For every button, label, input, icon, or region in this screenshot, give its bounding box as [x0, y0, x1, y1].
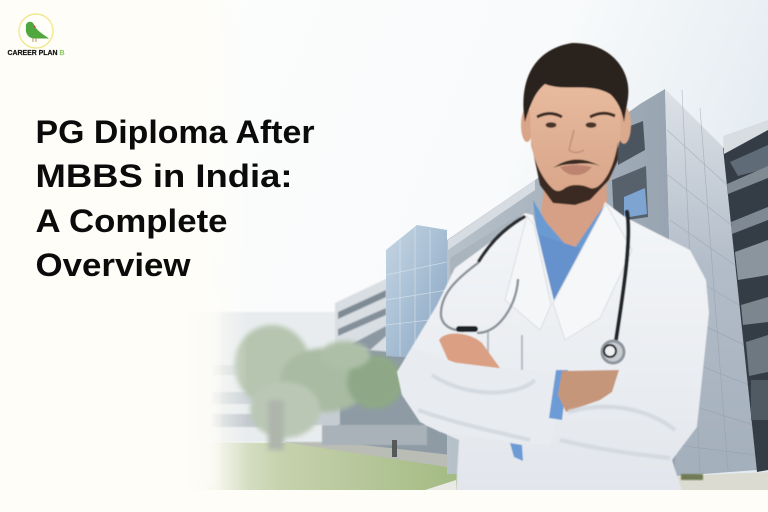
hand left	[439, 334, 500, 368]
logo wordmark: CAREER PLAN B	[8, 50, 64, 57]
title: MBBS in India:	[36, 158, 292, 194]
faded low building	[188, 312, 340, 442]
bottom band	[0, 490, 768, 512]
title: A Complete	[36, 203, 228, 239]
main building front face	[447, 89, 676, 474]
right sleeve crease	[560, 407, 675, 458]
moustache and goatee	[553, 159, 600, 198]
main building ribbon windows	[448, 121, 648, 275]
shrub at building foot	[681, 474, 703, 480]
nose	[569, 130, 584, 152]
logo ring	[19, 14, 53, 48]
coat centre seam	[488, 330, 522, 375]
left fade over photo	[183, 0, 248, 490]
side face tile lines	[667, 90, 756, 472]
distant dark building behind tree	[320, 345, 460, 457]
doctor figure	[397, 43, 709, 491]
beard	[531, 142, 618, 205]
lamp post	[392, 440, 397, 457]
logo	[8, 14, 64, 57]
blue cuff	[549, 370, 568, 420]
blue shirt	[533, 200, 605, 305]
stethoscope	[441, 212, 628, 363]
title: Overview	[36, 247, 191, 283]
lower blue shirt sliver	[510, 443, 523, 461]
glass tower	[386, 225, 447, 360]
tree	[234, 325, 403, 450]
sleeve crossed arm	[397, 347, 568, 445]
lower-left haze	[183, 300, 218, 490]
coat lapels	[505, 216, 551, 330]
pavement sliver near coat	[425, 480, 456, 490]
eyes and brows	[537, 113, 615, 117]
balcony block	[723, 120, 768, 472]
lips	[560, 165, 592, 175]
photo: hospital campus background	[183, 0, 768, 490]
hair	[523, 43, 628, 122]
path beside lawn	[285, 437, 460, 470]
title: PG Diploma After	[36, 114, 314, 150]
white mid building	[335, 278, 390, 352]
logo bird	[26, 22, 49, 42]
lab coat	[397, 202, 709, 491]
title	[36, 114, 314, 283]
main building side face	[665, 89, 757, 476]
head	[521, 43, 631, 205]
forearm	[558, 370, 619, 412]
lawn	[183, 442, 460, 490]
low pale wing in front of dark building	[322, 425, 427, 445]
neck	[540, 170, 608, 262]
sleeve shading	[418, 375, 535, 440]
pavement right	[676, 472, 768, 490]
